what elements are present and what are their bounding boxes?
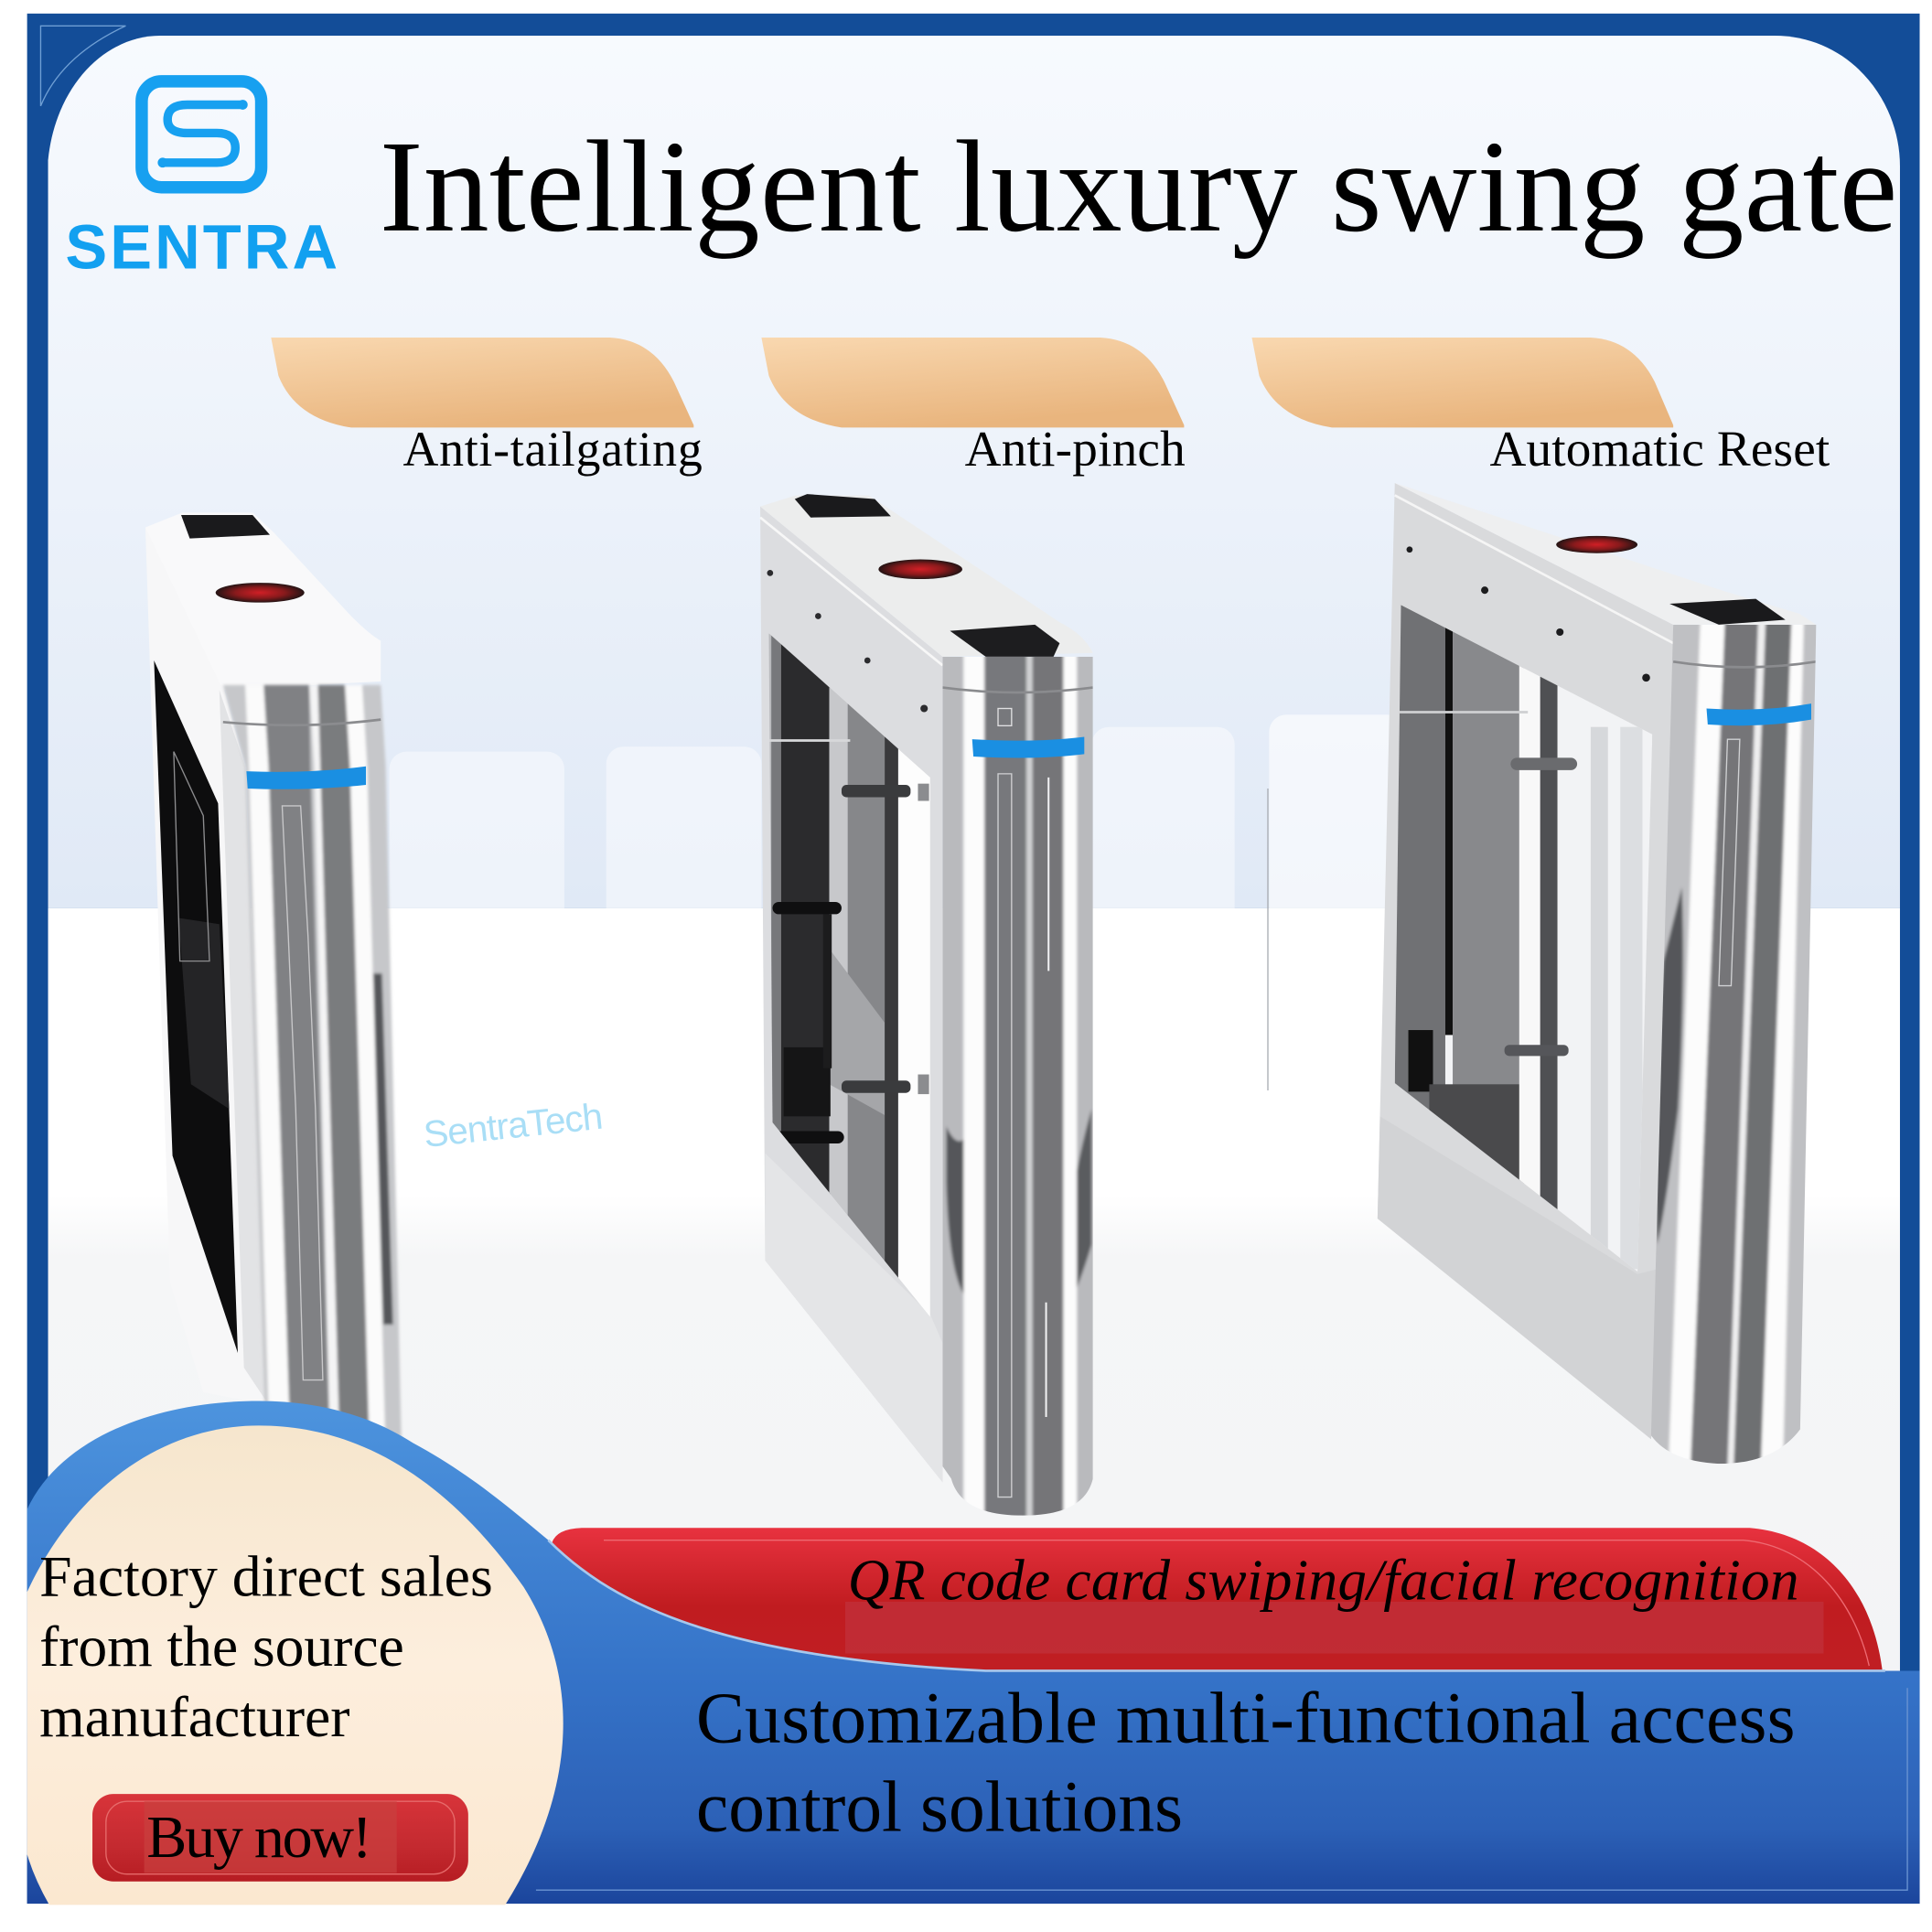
buy now button: Buy now! <box>146 1804 372 1871</box>
red sensor <box>216 583 305 603</box>
mounting holes <box>767 570 928 713</box>
logo icon <box>142 81 262 188</box>
feature tab: anti-tailgating <box>271 338 703 477</box>
window interior <box>1392 592 1658 1282</box>
title: Intelligent luxury swing gate <box>380 114 1897 260</box>
gate 1: left swing gate <box>145 512 402 1454</box>
banner text: QR code card swiping/facial recognition <box>848 1548 1799 1612</box>
side face <box>145 527 269 1405</box>
control panel front <box>950 625 1059 657</box>
feature tab: anti-pinch: Anti-pinch <box>965 421 1186 477</box>
control panel <box>181 515 270 539</box>
base panel <box>765 1154 942 1482</box>
gate 2: centre swing gate <box>760 494 1097 1521</box>
feature tab: anti-pinch <box>761 338 1186 477</box>
top face <box>760 495 1093 657</box>
base panel <box>1378 1116 1658 1439</box>
feature tab: automatic reset <box>1251 338 1830 477</box>
steel column <box>1647 620 1821 1469</box>
feature tab: automatic reset: Automatic Reset <box>1489 421 1830 477</box>
logo wordmark: SENTRA <box>65 212 338 283</box>
cream promo badge: from the source <box>39 1614 404 1679</box>
watermark: SentraTech <box>422 1095 605 1155</box>
side frame <box>1378 483 1673 1439</box>
glass panels behind gates <box>390 714 1405 1116</box>
control panel <box>1669 599 1786 625</box>
cream promo badge <box>27 1425 564 1905</box>
blue light ring <box>1707 703 1811 725</box>
blue light ring <box>972 736 1084 758</box>
window interior <box>768 633 930 1317</box>
promo text: Factory direct sales <box>39 1543 493 1608</box>
side frame <box>760 507 942 1482</box>
gate 3: right swing gate <box>1378 483 1821 1469</box>
red sensor <box>1556 536 1637 553</box>
feature tab: anti-tailgating: Anti-tailgating <box>402 422 703 477</box>
logo <box>65 81 338 283</box>
red banner <box>552 1528 1883 1725</box>
mounting holes <box>1407 546 1650 682</box>
steel column <box>939 653 1097 1521</box>
side window <box>154 660 238 1353</box>
buy now button <box>92 1794 468 1882</box>
control panel rear <box>795 494 891 518</box>
steel column <box>223 685 402 1454</box>
top face <box>145 512 381 690</box>
cream promo badge: manufacturer <box>39 1684 350 1749</box>
top face <box>1395 483 1816 625</box>
blue light ring <box>246 767 366 789</box>
blue base panel: control solutions <box>696 1767 1183 1848</box>
red sensor <box>878 560 962 579</box>
panel text: Customizable multi-functional access <box>696 1679 1795 1759</box>
blue base panel <box>27 1401 1920 1904</box>
